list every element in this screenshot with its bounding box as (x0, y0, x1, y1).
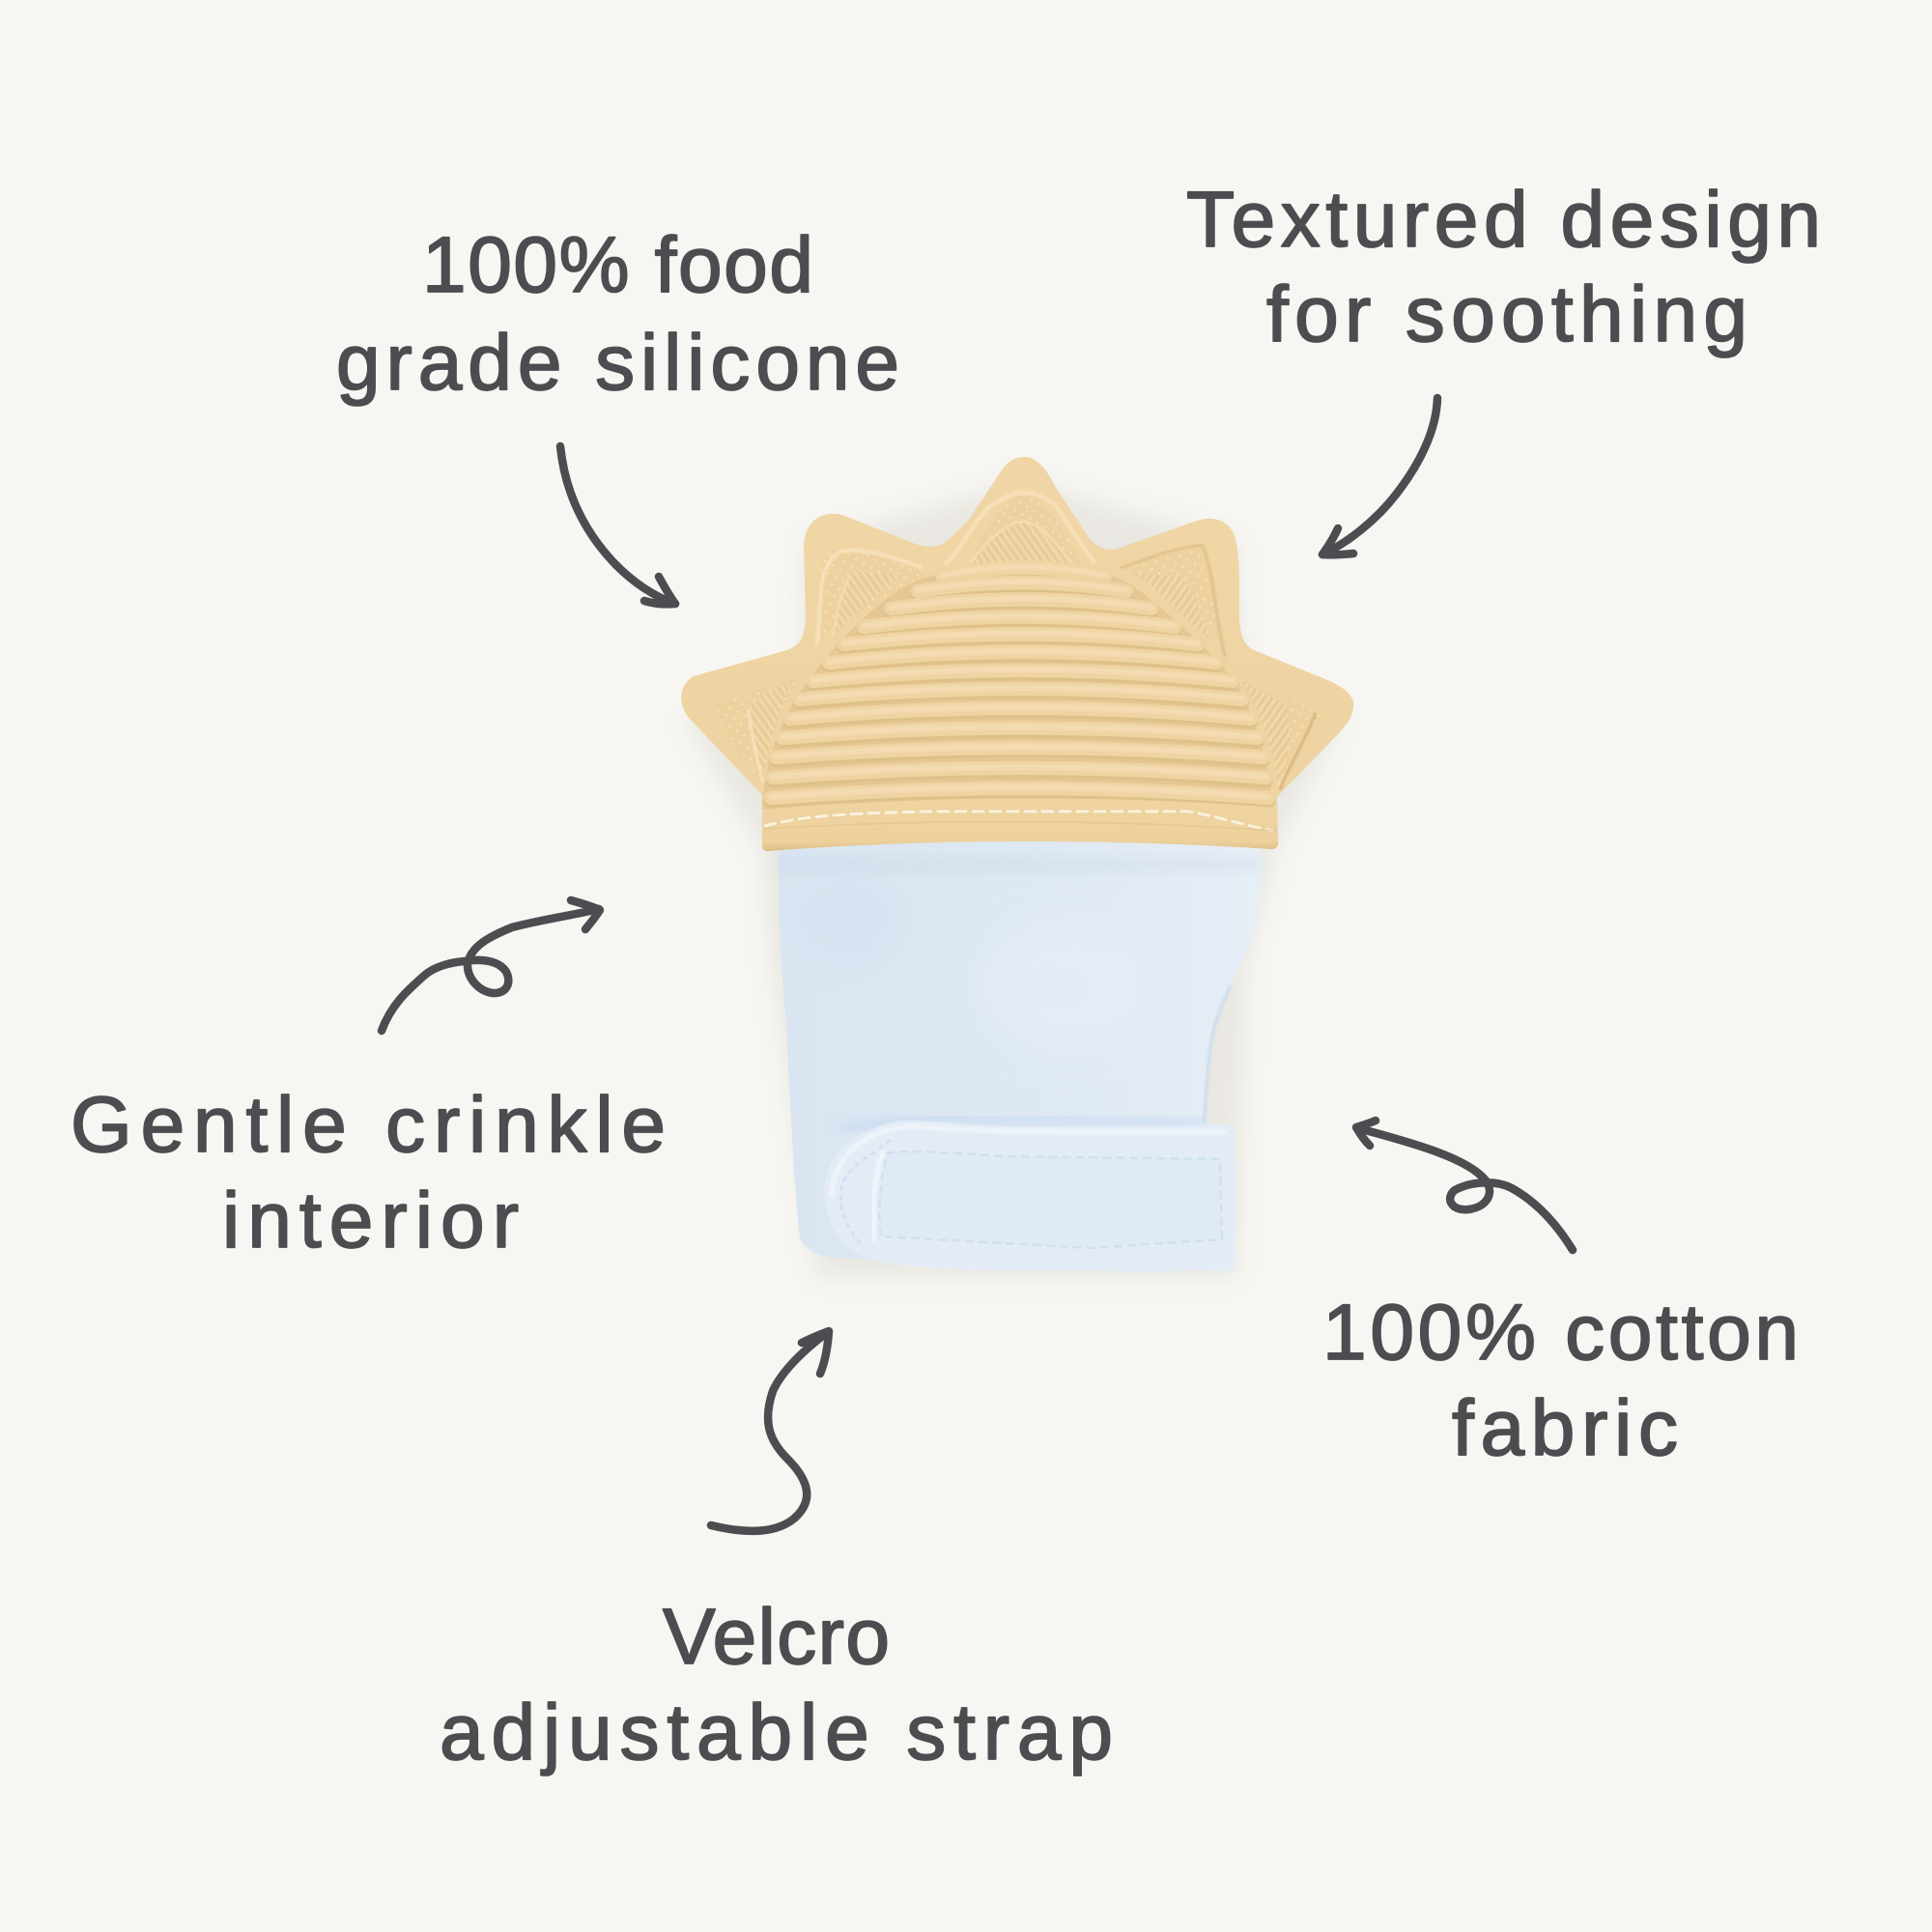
label: 100% food grade silicone (336, 221, 899, 407)
label: velcro adjustable strap: adjustable strap (440, 1689, 1113, 1776)
arrow: textured design (1322, 398, 1437, 554)
tooth texture panels (715, 493, 1320, 790)
label: 100% cotton fabric (1322, 1289, 1799, 1472)
label: 100% food grade silicone: 100% food (422, 221, 813, 309)
label: textured design for soothing: Textured design (1186, 176, 1821, 264)
label: 100% cotton fabric: 100% cotton (1322, 1289, 1799, 1377)
arrow: silicone (560, 446, 675, 604)
label: 100% cotton fabric: fabric (1452, 1384, 1678, 1472)
silicone ribs (762, 566, 1273, 816)
label: textured design for soothing (1186, 176, 1821, 358)
label: velcro adjustable strap (440, 1593, 1113, 1776)
label: textured design for soothing: for soothing (1266, 270, 1747, 358)
silicone band with stitching (762, 798, 1278, 851)
product: teething mitten (681, 457, 1353, 1277)
label: 100% food grade silicone: grade silicone (336, 319, 899, 407)
label: velcro adjustable strap: Velcro (663, 1593, 890, 1681)
label: gentle crinkle interior (71, 1081, 666, 1264)
label: gentle crinkle interior: Gentle crinkle (71, 1081, 666, 1169)
arrow: velcro strap (711, 1331, 829, 1531)
velcro strap (824, 1121, 1235, 1272)
arrow: crinkle interior (382, 900, 600, 1031)
silicone sun crown (681, 457, 1353, 851)
arrow: cotton fabric (1356, 1121, 1573, 1250)
cotton fabric mitten (779, 840, 1262, 1271)
mitten shadow (686, 483, 1343, 1277)
label: gentle crinkle interior: interior (222, 1177, 519, 1264)
